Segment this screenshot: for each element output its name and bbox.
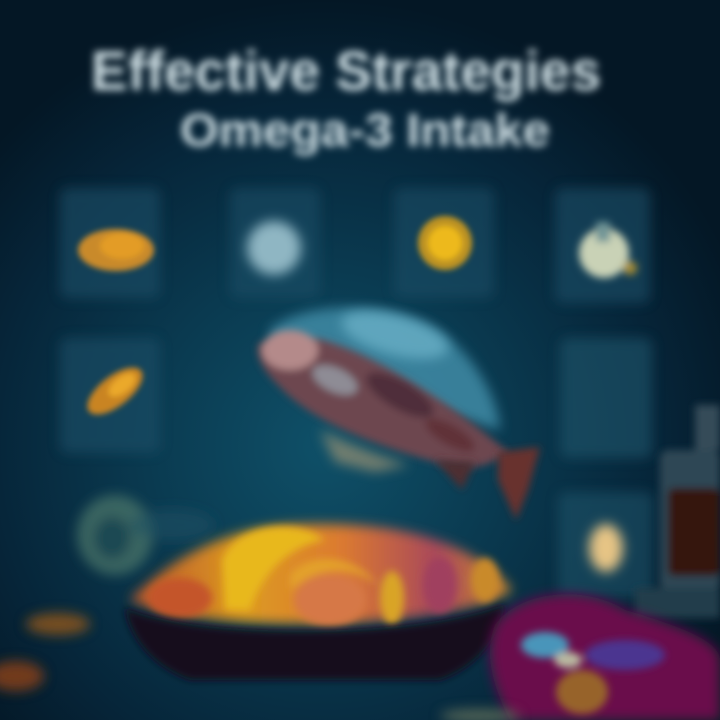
panel: top row card 4 bbox=[555, 188, 650, 303]
fish upper fin bbox=[268, 308, 500, 430]
panel: top row card 1 bbox=[60, 188, 160, 298]
fish body bbox=[258, 330, 508, 467]
pills bbox=[521, 632, 665, 714]
icon: orange capsule bbox=[80, 359, 150, 423]
panel: middle left card bbox=[60, 338, 160, 453]
bowl highlights bbox=[148, 527, 499, 626]
icon: cream glow bbox=[589, 524, 623, 572]
panel: lower left herbs bbox=[77, 495, 214, 575]
fish lower fin bbox=[320, 430, 410, 472]
icon: yellow sun bbox=[418, 216, 472, 270]
fish pale highlight bbox=[337, 301, 453, 369]
bowl dish bbox=[125, 604, 505, 680]
bowl of food bbox=[125, 524, 512, 680]
panel: middle right card bbox=[560, 338, 652, 458]
fish illustration bbox=[258, 301, 540, 520]
panel: top row card 2 bbox=[230, 188, 320, 298]
icon: pale bottle bbox=[579, 222, 637, 278]
icon: orange food bbox=[78, 229, 154, 271]
fish ventral fin bbox=[435, 460, 475, 490]
bowl food bbox=[130, 524, 512, 624]
title: Effective Strategies bbox=[91, 39, 601, 102]
magenta cloth bbox=[490, 594, 720, 720]
magenta cloth and pills bbox=[490, 594, 720, 720]
panel: top row card 3 bbox=[394, 188, 494, 298]
panel: lower right card bbox=[558, 492, 653, 598]
title bbox=[91, 39, 601, 156]
scattered food bbox=[0, 613, 520, 720]
icon: pale blue circle bbox=[247, 221, 301, 275]
fish tail bbox=[498, 447, 540, 520]
title: Omega-3 Intake bbox=[180, 104, 550, 156]
jar bbox=[635, 405, 720, 618]
